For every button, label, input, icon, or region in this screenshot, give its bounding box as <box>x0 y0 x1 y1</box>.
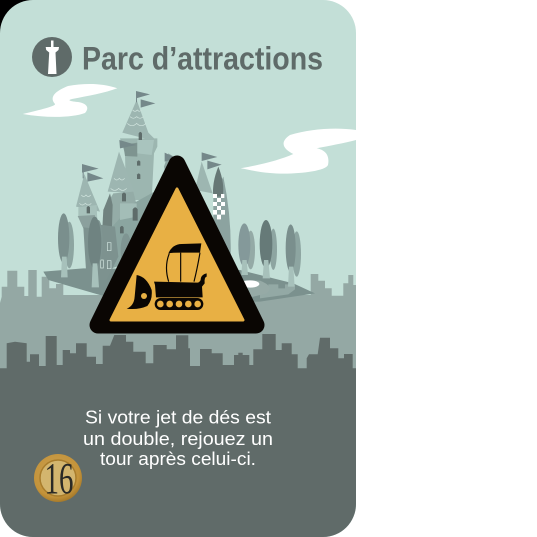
back skyline <box>0 270 356 368</box>
cloud: left <box>23 84 117 117</box>
heading icon: tower in circle <box>32 37 72 77</box>
coin: cost 16: 16 <box>44 454 74 503</box>
front skyline <box>0 334 356 537</box>
sign yellow field <box>111 189 243 320</box>
rule text: tour après celui-ci. <box>100 448 256 469</box>
card panel <box>0 0 356 537</box>
icon: bulldozer <box>127 243 207 310</box>
rule text: Si votre jet de dés est <box>85 406 271 428</box>
castle platform <box>43 268 315 303</box>
trees <box>58 213 301 287</box>
main tower <box>119 91 157 200</box>
checkered flag <box>213 194 225 219</box>
rule text <box>83 406 273 469</box>
warning sign <box>98 164 256 325</box>
castle scene <box>43 91 315 303</box>
left tower <box>76 164 103 270</box>
middle tower <box>98 152 154 269</box>
card illustration <box>0 0 356 537</box>
coin: cost 16 <box>34 454 82 503</box>
sign border <box>98 164 256 325</box>
rule text: un double, rejouez un <box>83 428 273 449</box>
title: Parc d’attractions <box>82 40 323 76</box>
right towers <box>164 152 231 257</box>
cloud: right <box>241 129 356 174</box>
